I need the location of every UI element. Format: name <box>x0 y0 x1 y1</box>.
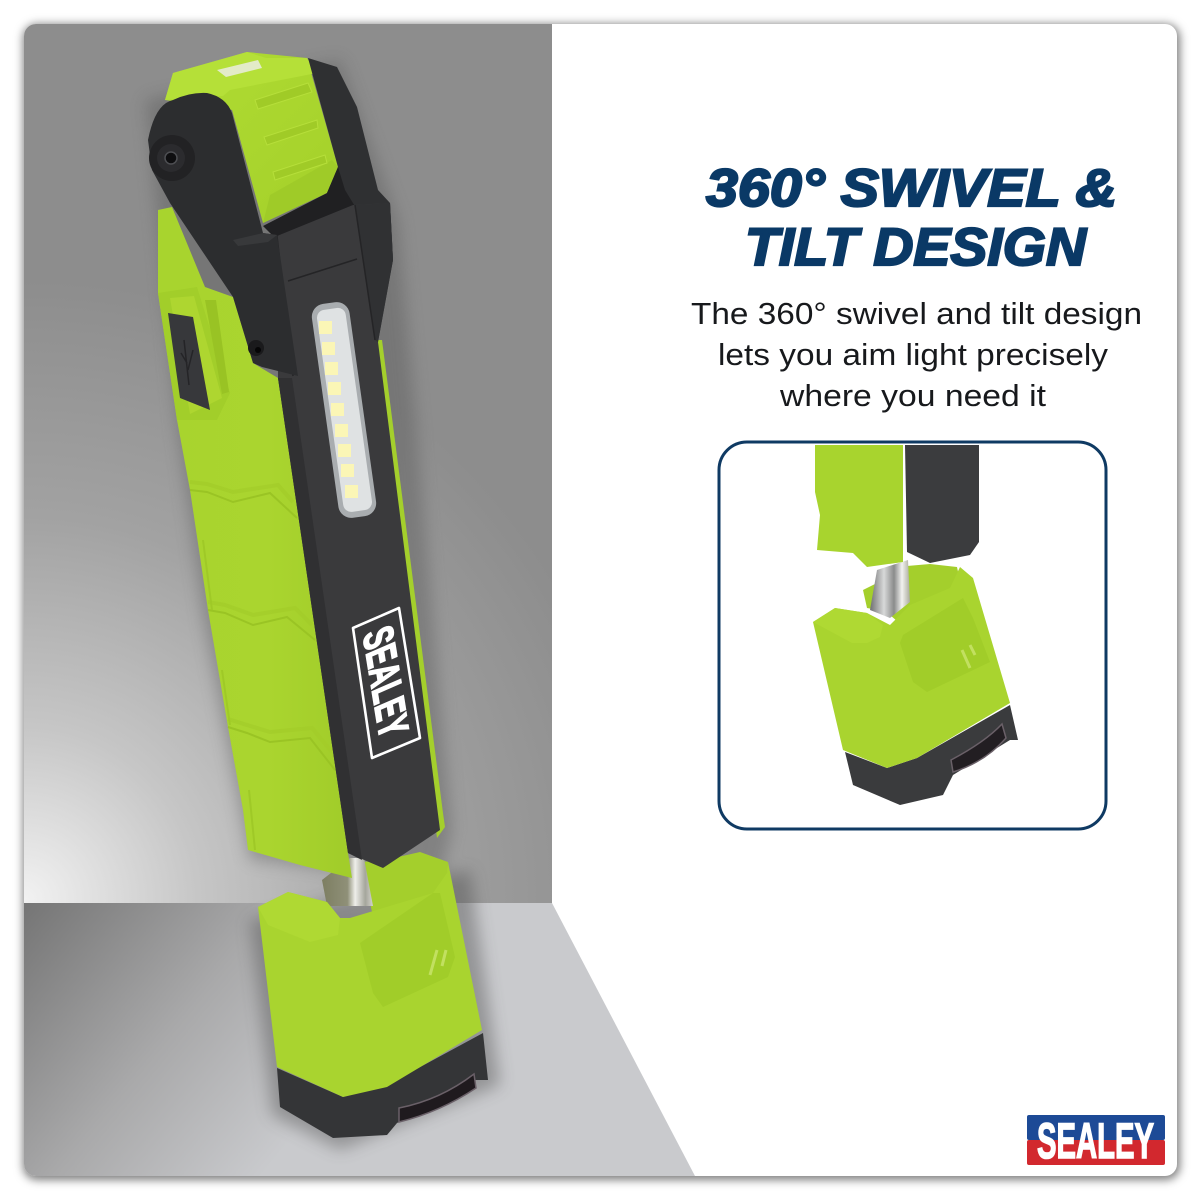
rear arm of hinge <box>308 58 393 340</box>
LED light strip <box>310 300 378 520</box>
description text <box>691 296 1142 413</box>
hinge clamp <box>277 203 393 376</box>
description text: The 360° swivel and tilt design <box>691 296 1142 331</box>
foot rear lip <box>362 852 448 912</box>
inset swivel foot <box>813 567 1018 805</box>
inset lip of foot <box>863 583 878 610</box>
inset frame <box>719 442 1106 829</box>
work lamp product illustration <box>148 52 488 1138</box>
heading <box>706 159 1117 277</box>
wall <box>24 24 552 904</box>
heading: TILT DESIGN <box>745 218 1088 277</box>
inset panel: close-up of swivel foot <box>719 442 1106 829</box>
USB port cover <box>158 287 230 420</box>
inset lamp green body <box>815 445 903 567</box>
heading: 360° SWIVEL & <box>706 159 1117 218</box>
SEALEY badge on lamp <box>353 608 420 758</box>
recess under barrel <box>263 167 356 240</box>
soft shadow around the lamp <box>146 60 500 1150</box>
main dark body <box>277 203 440 868</box>
swivel foot <box>258 862 488 1138</box>
SEALEY badge on lamp: SEALEY <box>354 619 418 746</box>
grip ribs <box>190 490 335 770</box>
floor <box>24 903 695 1176</box>
description text: where you need it <box>779 378 1046 413</box>
lamp green rear body <box>158 207 445 878</box>
rotating green barrel <box>165 52 338 223</box>
panel: photo backdrop <box>24 24 695 1176</box>
inset rear lip of foot <box>890 564 962 628</box>
inset metal shaft <box>870 560 910 618</box>
front hinge arm with screw <box>148 93 298 376</box>
metal swivel shaft <box>322 858 373 906</box>
inset lamp dark body <box>905 445 979 563</box>
description text: lets you aim light precisely <box>718 337 1109 372</box>
